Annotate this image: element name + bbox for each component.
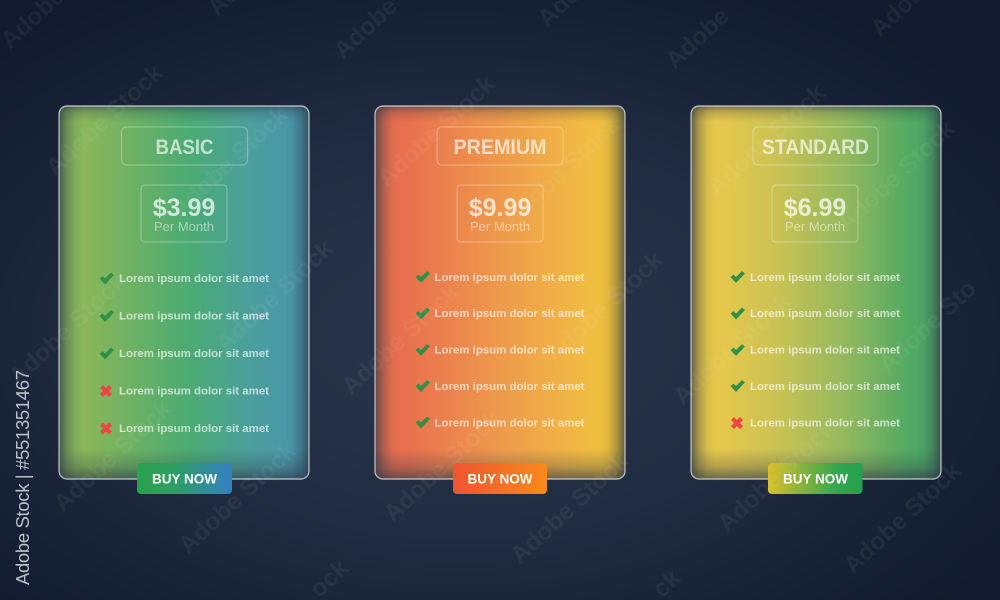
feature list: basic [100,273,269,435]
watermarks: Adobe [661,3,735,74]
price: premium: Per Month [470,219,530,234]
feature list: standard: Lorem ipsum dolor sit amet [750,381,900,393]
heading: standard [753,127,878,165]
watermarks: Adobe Stock [833,115,961,237]
price: standard: $6.99 [784,194,846,222]
watermarks: Adobe Stock [49,395,177,517]
heading: basic: BASIC [156,136,214,159]
heading: premium [437,127,563,165]
feature list: premium: Lorem ipsum dolor sit amet [434,308,585,320]
feature list: standard: Lorem ipsum dolor sit amet [750,308,900,320]
price: premium: $9.99 [469,194,531,222]
feature list: premium [416,272,585,430]
feature list: standard [731,272,900,430]
button: premium: BUY NOW [467,472,533,486]
button: basic: BUY NOW [152,472,217,486]
heading: premium: PREMIUM [454,136,546,159]
feature list: basic: Lorem ipsum dolor sit amet [119,423,269,435]
panel: standard plan [691,106,941,494]
button: premium [453,463,547,494]
watermarks: Adobe Stock [41,59,169,181]
panel: premium plan [375,106,625,494]
watermarks: Adobe Stock [373,70,501,192]
feature list: premium: Lorem ipsum dolor sit amet [434,418,585,430]
watermarks: Adobe Stock [839,457,967,579]
watermarks: Adobe Stock [337,278,465,400]
button: standard [768,463,862,494]
feature list: standard: Lorem ipsum dolor sit amet [750,344,900,356]
feature list: premium: Lorem ipsum dolor sit amet [434,381,585,393]
price: premium [457,185,543,242]
heading: basic [122,127,248,165]
feature list: standard: Lorem ipsum dolor sit amet [750,418,900,430]
watermarks: Adobe Stock [498,111,626,233]
price: basic: Per Month [154,219,214,234]
feature list: basic: Lorem ipsum dolor sit amet [119,310,269,322]
feature list: basic: Lorem ipsum dolor sit amet [119,348,269,360]
watermarks: Adobe Stock [506,447,634,569]
button: standard: BUY NOW [783,472,848,486]
watermarks: Adobe Stock [174,437,302,559]
watermarks: Adobe Sto [874,275,982,378]
price: standard [772,185,858,242]
button: basic [137,463,232,494]
heading: standard: STANDARD [762,136,869,159]
stock id caption: Adobe Stock | #551351467 [12,370,33,585]
watermarks: Adobe Stock [669,288,797,410]
feature list: standard: Lorem ipsum dolor sit amet [750,272,900,284]
price: basic: $3.99 [153,194,215,222]
panel: basic plan [59,106,309,494]
feature list: premium: Lorem ipsum dolor sit amet [434,344,585,356]
watermarks: Adobe Stock [541,246,669,368]
price: basic [141,185,227,242]
watermarks: Adobe Stock [713,415,841,537]
watermarks: Adobe Stock [211,235,339,357]
watermarks: Adobe Stock [703,79,831,201]
watermarks: Adobe Stock [379,405,507,527]
feature list: basic: Lorem ipsum dolor sit amet [119,273,269,285]
feature list: premium: Lorem ipsum dolor sit amet [434,272,585,284]
watermarks: Adobe Stock [4,268,132,390]
price: standard: Per Month [785,219,845,234]
watermarks: Adobe Stock [166,101,294,223]
feature list: basic: Lorem ipsum dolor sit amet [119,386,269,398]
